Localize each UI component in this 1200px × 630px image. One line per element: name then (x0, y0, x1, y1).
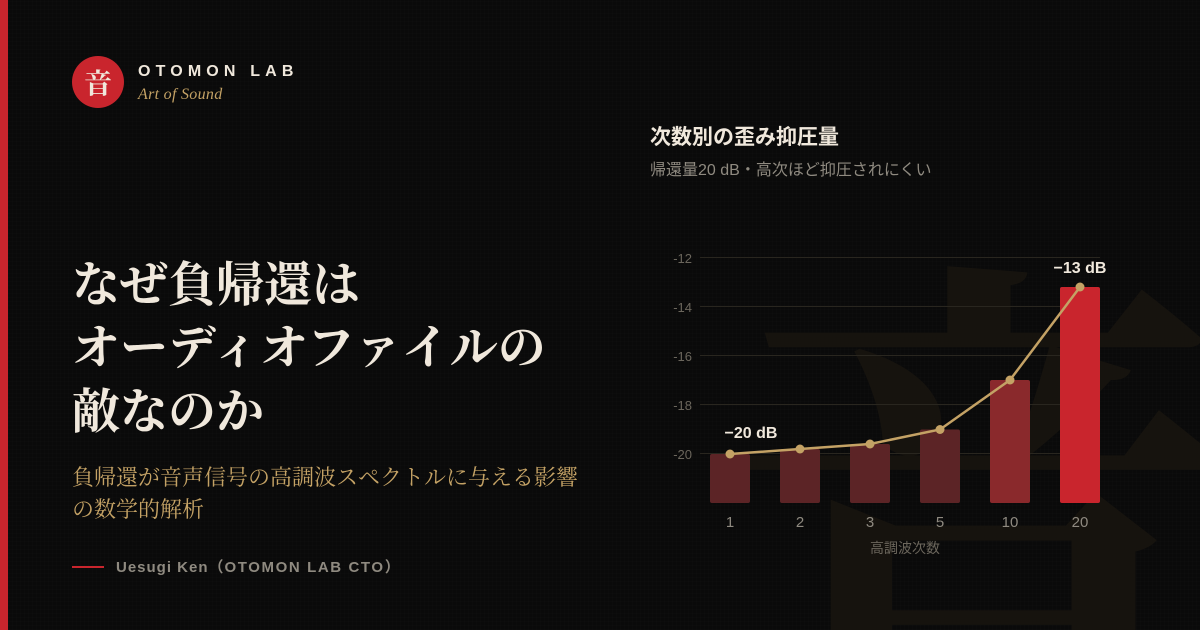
x axis labels (726, 514, 1088, 531)
title: オーディオファイルの (72, 322, 546, 375)
chart subheading: 帰還量20 dB・高次ほど抑圧されにくい (650, 162, 932, 179)
y axis labels: -16 (673, 349, 692, 364)
title: なぜ負帰還は (72, 259, 360, 312)
author rule (72, 566, 104, 568)
trend line (726, 282, 1084, 458)
y axis labels: -20 (673, 447, 692, 462)
icon: logo circle (72, 56, 124, 108)
bars (710, 287, 1100, 503)
title (72, 259, 546, 439)
y axis labels: -14 (673, 300, 692, 315)
y axis labels (673, 251, 692, 462)
x axis labels: 1 (726, 514, 734, 531)
value labels (725, 260, 1106, 442)
x axis labels: 3 (866, 514, 874, 531)
value labels: −13 dB (1054, 260, 1106, 277)
subtitle: の数学的解析 (72, 497, 204, 522)
x axis labels: 10 (1002, 514, 1018, 531)
logo (72, 56, 299, 108)
left accent bar (0, 0, 8, 630)
logo tagline: Art of Sound (138, 86, 222, 103)
x axis title: 高調波次数 (870, 540, 940, 556)
y axis labels: -12 (673, 251, 692, 266)
y axis labels: -18 (673, 398, 692, 413)
subtitle (72, 465, 578, 522)
logo name: OTOMON LAB (138, 63, 299, 80)
x axis labels: 20 (1072, 514, 1088, 531)
chart heading: 次数別の歪み抑圧量 (650, 126, 839, 149)
value labels: −20 dB (725, 425, 777, 442)
x axis labels: 2 (796, 514, 804, 531)
x axis labels: 5 (936, 514, 944, 531)
subtitle: 負帰還が音声信号の高調波スペクトルに与える影響 (72, 465, 578, 490)
icon: logo circle: 音 (84, 69, 112, 100)
author name: Uesugi Ken（OTOMON LAB CTO） (116, 559, 401, 576)
title: 敵なのか (72, 386, 264, 439)
